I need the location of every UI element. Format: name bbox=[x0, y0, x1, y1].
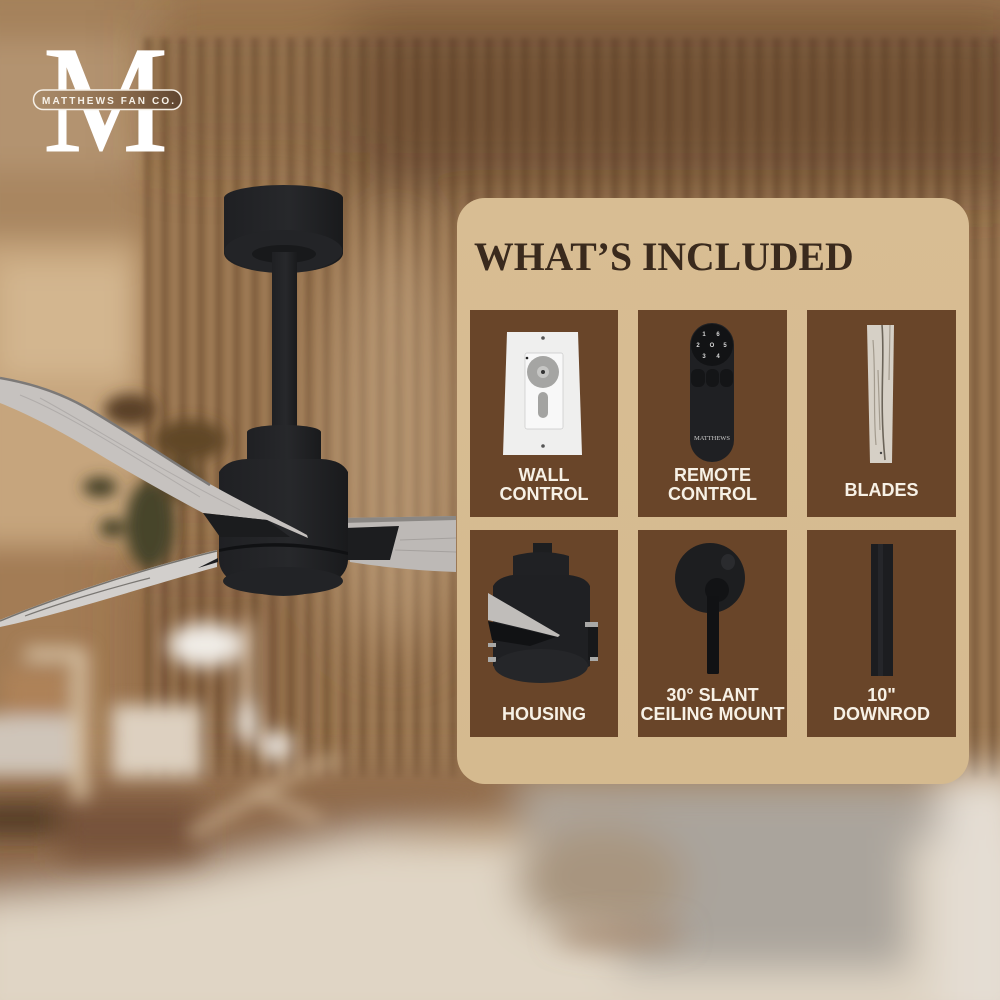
label: CEILING MOUNT bbox=[640, 704, 784, 724]
heading: WHAT’S INCLUDED bbox=[474, 235, 854, 279]
icon: blade bbox=[867, 325, 894, 463]
tile: remote control bbox=[638, 310, 787, 517]
icon: remote bbox=[690, 323, 734, 462]
icon: remote: 1 bbox=[702, 332, 706, 338]
slatted wood wall bbox=[145, 38, 1000, 778]
icon: remote: 6 bbox=[716, 332, 720, 338]
tile: wall control bbox=[470, 310, 618, 517]
tile: housing bbox=[470, 530, 618, 737]
icon: remote: O bbox=[710, 343, 715, 349]
icon: housing bbox=[488, 543, 598, 683]
panel: what's included bbox=[457, 198, 969, 784]
label bbox=[500, 465, 588, 504]
ceiling band bbox=[0, 0, 1000, 36]
icon: downrod bbox=[871, 544, 893, 676]
logo: Matthews Fan Co.: M bbox=[43, 16, 168, 185]
icon: remote: 4 bbox=[716, 354, 720, 360]
blurred plant bbox=[83, 394, 226, 569]
label: 10" bbox=[867, 685, 896, 705]
logo: Matthews Fan Co.: MATTHEWS FAN CO. bbox=[42, 96, 174, 107]
icon: remote: 3 bbox=[702, 354, 706, 360]
left wall bbox=[0, 0, 170, 845]
label: WALL bbox=[518, 465, 570, 485]
label: CONTROL bbox=[668, 484, 757, 504]
label: HOUSING bbox=[502, 704, 586, 724]
icon: remote: 2 bbox=[696, 343, 700, 349]
label: BLADES bbox=[844, 480, 918, 500]
blurred furniture bbox=[0, 620, 340, 835]
label: CONTROL bbox=[500, 484, 588, 504]
blurred floor bbox=[0, 770, 1000, 1000]
fan blade: right bbox=[342, 516, 456, 572]
fan motor housing bbox=[219, 425, 348, 596]
label: 30° SLANT bbox=[666, 685, 759, 705]
icon: remote: 5 bbox=[723, 343, 727, 349]
tile: slant ceiling mount bbox=[638, 530, 787, 737]
label: REMOTE bbox=[674, 465, 751, 485]
dark floor shadow bbox=[0, 800, 685, 947]
fan downrod bbox=[272, 252, 297, 428]
wall light and shadow wash bbox=[130, 10, 1000, 770]
label: DOWNROD bbox=[833, 704, 930, 724]
icon: wall control bbox=[503, 332, 582, 455]
fan blade: upper left bbox=[0, 377, 308, 538]
fan canopy bbox=[224, 185, 343, 273]
tile: blades bbox=[807, 310, 956, 517]
tile: downrod bbox=[807, 530, 956, 737]
label bbox=[833, 685, 930, 724]
fan blade: lower left bbox=[0, 550, 218, 627]
label bbox=[668, 465, 757, 504]
icon: remote: MATTHEWS bbox=[694, 435, 730, 442]
label bbox=[640, 685, 784, 724]
icon: ceiling mount bbox=[675, 543, 745, 674]
